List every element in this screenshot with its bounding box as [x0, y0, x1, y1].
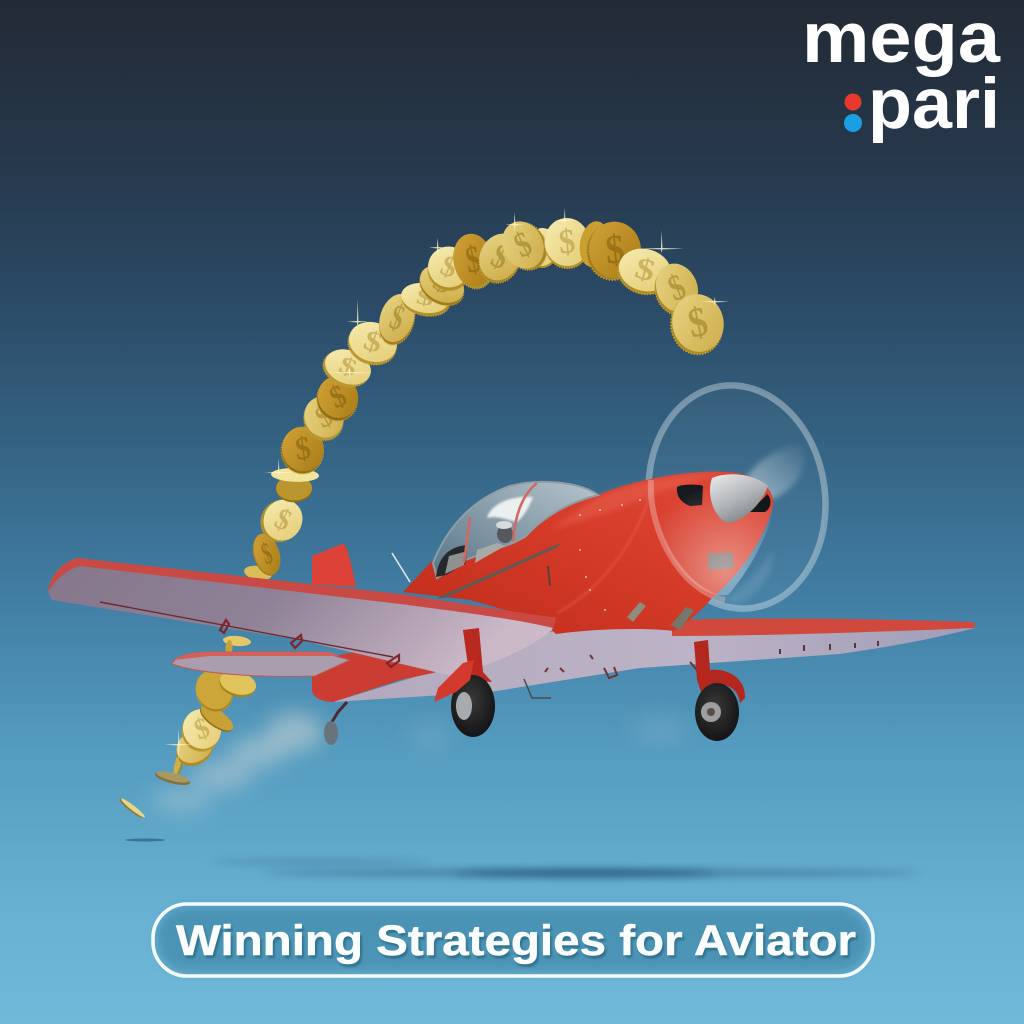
coin — [524, 227, 560, 269]
cowl vent right — [748, 494, 771, 512]
coin: $ — [631, 251, 659, 288]
airplane — [48, 374, 975, 745]
coin — [421, 240, 477, 297]
title text: Winning Strategies for Aviator — [176, 917, 856, 965]
logo red dot — [844, 94, 862, 110]
left wing — [48, 558, 556, 675]
coin: $ — [436, 249, 462, 285]
coin: $ — [428, 268, 456, 300]
coin — [613, 243, 676, 300]
rear fuselage — [312, 625, 560, 702]
coin — [254, 492, 309, 549]
coin: $ — [258, 537, 276, 571]
badge inner shading — [156, 906, 870, 973]
coin: $ — [508, 223, 537, 265]
coin — [223, 635, 251, 647]
coin — [295, 389, 352, 448]
title text shadow: Winning Strategies for Aviator — [178, 920, 858, 968]
coin — [647, 257, 706, 322]
cowl vent lower — [708, 552, 733, 570]
coin: $ — [604, 226, 626, 273]
antenna — [392, 553, 410, 582]
coin: $ — [270, 502, 296, 538]
coin — [665, 289, 730, 359]
title badge — [153, 904, 873, 976]
coin — [225, 640, 233, 656]
coin — [543, 216, 592, 270]
coin — [584, 219, 644, 282]
coin — [188, 664, 240, 718]
coin — [271, 467, 319, 483]
prop wash over cowl — [650, 472, 773, 595]
cowl ring — [651, 480, 725, 600]
logo word pari: pari — [868, 65, 1000, 144]
coin sparkles — [164, 208, 729, 761]
coin: $ — [310, 399, 338, 435]
tailplane top edge — [174, 652, 340, 660]
coin — [318, 343, 376, 393]
coin: $ — [557, 222, 577, 262]
coin — [373, 289, 421, 349]
coin — [276, 476, 312, 502]
cowl vent left — [677, 485, 703, 506]
coin: $ — [663, 267, 691, 309]
right wing and belly underside — [333, 619, 975, 702]
fuselage panel ridge — [557, 483, 653, 613]
coin: $ — [414, 285, 436, 311]
coin: $ — [385, 297, 409, 338]
coin — [495, 214, 554, 278]
exhaust pipes — [627, 602, 694, 630]
coin: $ — [486, 235, 515, 277]
ground shadow — [125, 838, 920, 877]
exhaust smoke trail — [152, 712, 688, 813]
coin — [309, 369, 366, 427]
coin: $ — [324, 378, 352, 415]
tail fin — [312, 544, 356, 587]
coin — [398, 279, 452, 320]
coin: $ — [293, 429, 313, 467]
coin — [172, 750, 186, 777]
coin — [449, 230, 498, 292]
coin: $ — [684, 298, 712, 347]
coin — [168, 722, 221, 773]
coin — [243, 564, 273, 582]
cowling highlight — [550, 474, 725, 530]
logo blue dot — [844, 114, 862, 132]
spinner — [710, 474, 768, 523]
left main landing gear — [434, 628, 495, 737]
coin — [412, 258, 472, 313]
coin — [217, 667, 259, 701]
coin — [196, 701, 237, 736]
coin: $ — [462, 238, 484, 282]
coin — [278, 424, 327, 476]
propeller disc ring — [634, 374, 840, 620]
coin — [176, 704, 227, 757]
badge outline — [153, 904, 873, 976]
coin: $ — [190, 712, 214, 747]
side stripe — [437, 543, 560, 598]
coin — [471, 227, 529, 290]
logo word mega: mega — [802, 0, 1001, 78]
panel marks — [548, 566, 550, 586]
belly step — [524, 679, 551, 698]
right main landing gear — [694, 640, 745, 741]
coin: $ — [335, 352, 360, 382]
tailplane — [172, 652, 350, 676]
logo: megapari — [802, 0, 1001, 144]
coin — [248, 530, 286, 579]
rivets — [579, 499, 641, 611]
coin — [118, 796, 146, 820]
coin: $ — [360, 323, 387, 359]
fuselage — [403, 472, 773, 634]
falling gold coin arc — [118, 208, 730, 820]
coin — [343, 316, 402, 371]
canopy — [433, 482, 598, 578]
coin — [154, 769, 191, 788]
coin — [576, 219, 612, 269]
tail wheel — [324, 702, 347, 745]
